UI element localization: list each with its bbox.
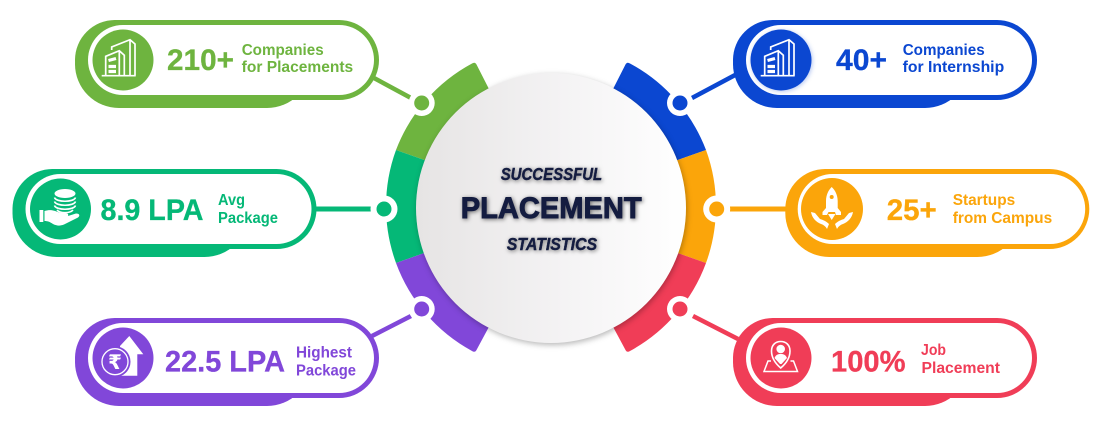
ring segment: blue xyxy=(611,63,706,162)
connector: purple xyxy=(372,316,411,336)
connector: red xyxy=(693,316,738,339)
stat label xyxy=(921,342,1000,377)
icon: rupee coin with arrow xyxy=(100,336,143,377)
node: red xyxy=(667,296,693,322)
node: orange xyxy=(703,196,730,222)
stat label xyxy=(903,42,1004,76)
stat value: 25+ xyxy=(887,194,937,227)
stat label: Companies xyxy=(242,42,324,59)
node: green xyxy=(409,90,435,116)
centre title: SUCCESSFUL xyxy=(501,164,602,184)
stat label xyxy=(242,42,353,76)
stat value: 40+ xyxy=(836,44,887,77)
connector: teal xyxy=(314,206,372,212)
centre title xyxy=(461,164,642,254)
stat label: for Internship xyxy=(903,59,1004,76)
panel: companies for internship xyxy=(733,20,1037,108)
icon: buildings xyxy=(761,40,795,76)
stat label: Companies xyxy=(903,42,985,59)
stat value: 210+ xyxy=(167,44,234,77)
ring segment: purple xyxy=(396,251,491,352)
icon: rocket and hands xyxy=(811,187,853,229)
node: teal xyxy=(370,196,398,222)
panel: startups from campus xyxy=(785,169,1089,257)
panel: job placement xyxy=(733,318,1037,406)
node: blue xyxy=(667,90,693,116)
panel: highest package xyxy=(75,318,379,406)
icon: rupee coin with arrow: ₹ xyxy=(108,350,122,374)
stat label: Avg xyxy=(218,192,245,209)
connector: orange xyxy=(730,206,788,212)
ring segment: orange xyxy=(672,150,716,263)
centre disc xyxy=(416,73,686,343)
icon: person location pin on map xyxy=(764,342,798,372)
stat value: 100% xyxy=(831,346,906,378)
stat label: from Campus xyxy=(953,210,1052,227)
icon: buildings xyxy=(102,40,136,76)
node: purple xyxy=(409,296,435,322)
stat label xyxy=(953,192,1052,227)
ring segment: teal xyxy=(386,150,430,263)
centre title: PLACEMENT xyxy=(461,192,642,225)
stat label: Startups xyxy=(953,192,1015,209)
stat value: 22.5 LPA xyxy=(165,346,285,378)
connector: green xyxy=(374,78,411,98)
stat label: Job xyxy=(921,342,946,359)
stat value: 8.9 LPA xyxy=(100,194,204,227)
ring segment: red xyxy=(611,251,706,352)
stat label xyxy=(218,192,278,227)
icon: coins in hand xyxy=(40,189,79,226)
centre title: STATISTICS xyxy=(507,234,597,254)
stat label: Package xyxy=(218,210,278,227)
stat label: Package xyxy=(296,362,356,380)
stat label xyxy=(296,344,356,380)
connector: blue xyxy=(692,74,737,98)
stat label: Placement xyxy=(922,360,1000,377)
panel: average package xyxy=(12,169,316,257)
stat label: for Placements xyxy=(242,59,353,76)
panel: companies for placements xyxy=(75,20,379,108)
ring segment: green xyxy=(396,63,491,162)
stat label: Highest xyxy=(296,344,352,362)
